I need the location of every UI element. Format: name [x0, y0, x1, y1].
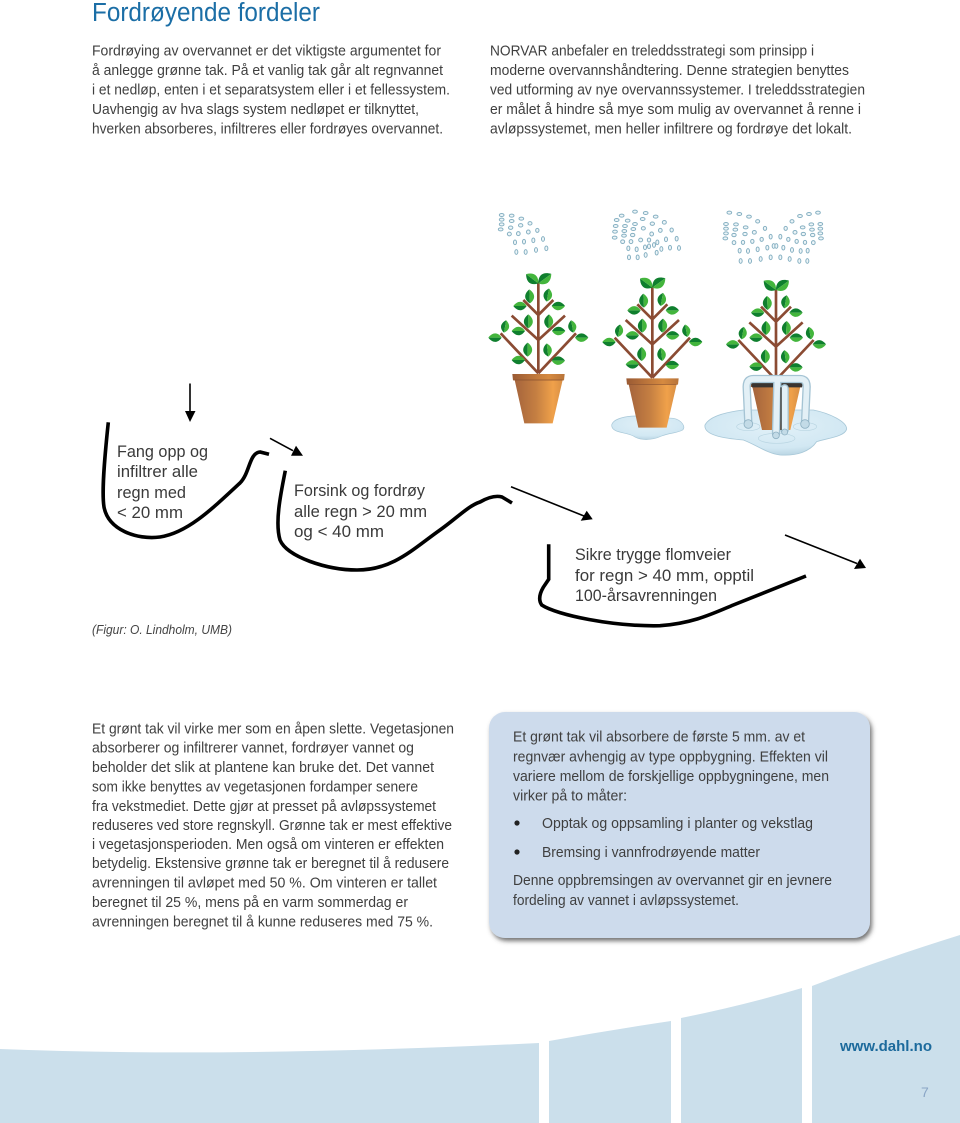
illustration: plants with rain and puddles: [488, 210, 847, 455]
text: delay: [294, 482, 427, 541]
panel: absorption callout: Et grønt tak vil absorbere de første 5 mm. av et: [513, 730, 805, 746]
arrow: second slope: [511, 487, 593, 521]
panel: absorption callout: virker på to måter:: [513, 789, 627, 805]
text: capture: < 20 mm: [117, 504, 183, 522]
rain drops: small: [498, 213, 548, 254]
arrow: first slope: [270, 438, 303, 456]
panel: absorption callout: fordeling av vannet i avløpssystemet.: [513, 893, 739, 909]
panel: absorption callout: variere mellom de forskjellige oppbygningene, men: [513, 769, 829, 785]
text block: intro right: NORVAR anbefaler en treleddsstrategi som prinsipp i: [490, 44, 814, 60]
text: flood: Sikre trygge flomveier: [575, 546, 731, 564]
text block: green roof explanation: Et grønt tak vil virke mer som en åpen slette. Vegetasjonen: [92, 721, 454, 737]
puddle 3: [705, 410, 847, 455]
text block: green roof explanation: i vegetasjonsperioden. Men også om vinteren er effekten: [92, 837, 444, 853]
figure credit: (Figur: O. Lindholm, UMB): [92, 622, 232, 637]
text: delay: og < 40 mm: [294, 523, 384, 541]
bullet: uptake: Opptak og oppsamling i planter og vekstlag: [542, 816, 813, 832]
bullet: braking: Bremsing i vannfrodrøyende matter: [542, 845, 760, 861]
text: flood: 100-årsavrenningen: [575, 587, 717, 605]
text block: green roof explanation: avrenningen beregnet til å kunne reduseres med 75 %.: [92, 915, 433, 931]
text: flood: [575, 546, 754, 605]
footer background shape: [0, 935, 960, 1123]
text block: intro right: er målet å hindre så mye som mulig av overvannet å renne i: [490, 102, 861, 118]
text: delay: Forsink og fordrøy: [294, 482, 426, 500]
panel: absorption callout: [489, 712, 870, 938]
curve: capture zone: [103, 422, 269, 538]
panel: absorption callout: regnvær avhengig av type oppbygning. Effekten vil: [513, 750, 828, 766]
text block: intro left: Fordrøying av overvannet er det viktigste argumentet for: [92, 44, 441, 60]
text: capture: [117, 443, 208, 522]
text: capture: infiltrer alle: [117, 463, 198, 481]
text: flood: for regn > 40 mm, opptil: [575, 567, 754, 585]
text block: green roof explanation: betydelig. Ekstensive grønne tak er beregnet til å redusere: [92, 856, 449, 872]
text block: intro right: ved utforming av nye overvannssystemer. I treleddsstrategien: [490, 83, 865, 99]
text block: green roof explanation: fra vekstmediet. Dette gjør at presset på avløpssystemet: [92, 799, 436, 815]
text block: green roof explanation: som ikke benyttes av vegetasjonen fordamper senere: [92, 780, 418, 796]
puddle 2: [612, 416, 684, 439]
text block: intro left: i et nedløp, enten i et separatsystem eller i et fellessystem.: [92, 83, 450, 99]
text block: intro right: avløpssystemet, men heller infiltrere og fordrøye det lokalt.: [490, 122, 852, 138]
text block: green roof explanation: avrenningen til avløpet med 50 %. Om vinteren er tallet: [92, 876, 437, 892]
rain drops: heavy: [723, 211, 823, 263]
text block: green roof explanation: absorberer og infiltrerer vannet, fordrøyer vannet og: [92, 741, 414, 757]
plant 1 in pot: [488, 270, 588, 423]
text block: intro right: moderne overvannshåndtering. Denne strategien benyttes: [490, 63, 849, 79]
text block: intro left: å anlegge grønne tak. På et vanlig tak går alt regnvannet: [92, 63, 443, 79]
text: delay: alle regn > 20 mm: [294, 503, 427, 521]
panel: absorption callout: Denne oppbremsingen av overvannet gir en jevnere: [513, 873, 832, 889]
text block: intro left: hverken absorberes, infiltreres eller fordrøyes overvannet.: [92, 122, 443, 138]
text block: intro left: [92, 44, 450, 138]
plant 3 in flooded pot: [726, 276, 826, 443]
arrow: vertical rain: [185, 384, 196, 422]
plant 2 in pot: [602, 274, 702, 428]
text: capture: regn med: [117, 484, 186, 502]
arrow: third slope: [785, 535, 866, 569]
text block: green roof explanation: beholder det slik at plantene kan bruke det. Det vannet: [92, 760, 434, 776]
curve: delay zone: [278, 471, 512, 570]
text block: intro right: [490, 44, 865, 138]
text block: green roof explanation: reduseres ved store regnskyll. Grønne tak er mest effektive: [92, 818, 452, 834]
text block: green roof explanation: beregnet til 25 %, mens på en varm sommerdag er: [92, 895, 408, 911]
text: capture: Fang opp og: [117, 443, 208, 461]
website: www.dahl.no: [839, 1039, 932, 1055]
text block: intro left: Uavhengig av hva slags system nedløpet er tilknyttet,: [92, 102, 419, 118]
text block: green roof explanation: [92, 721, 454, 931]
curve: flood route: [540, 544, 806, 626]
page number: 7: [921, 1084, 929, 1100]
rain drops: medium: [612, 210, 680, 260]
